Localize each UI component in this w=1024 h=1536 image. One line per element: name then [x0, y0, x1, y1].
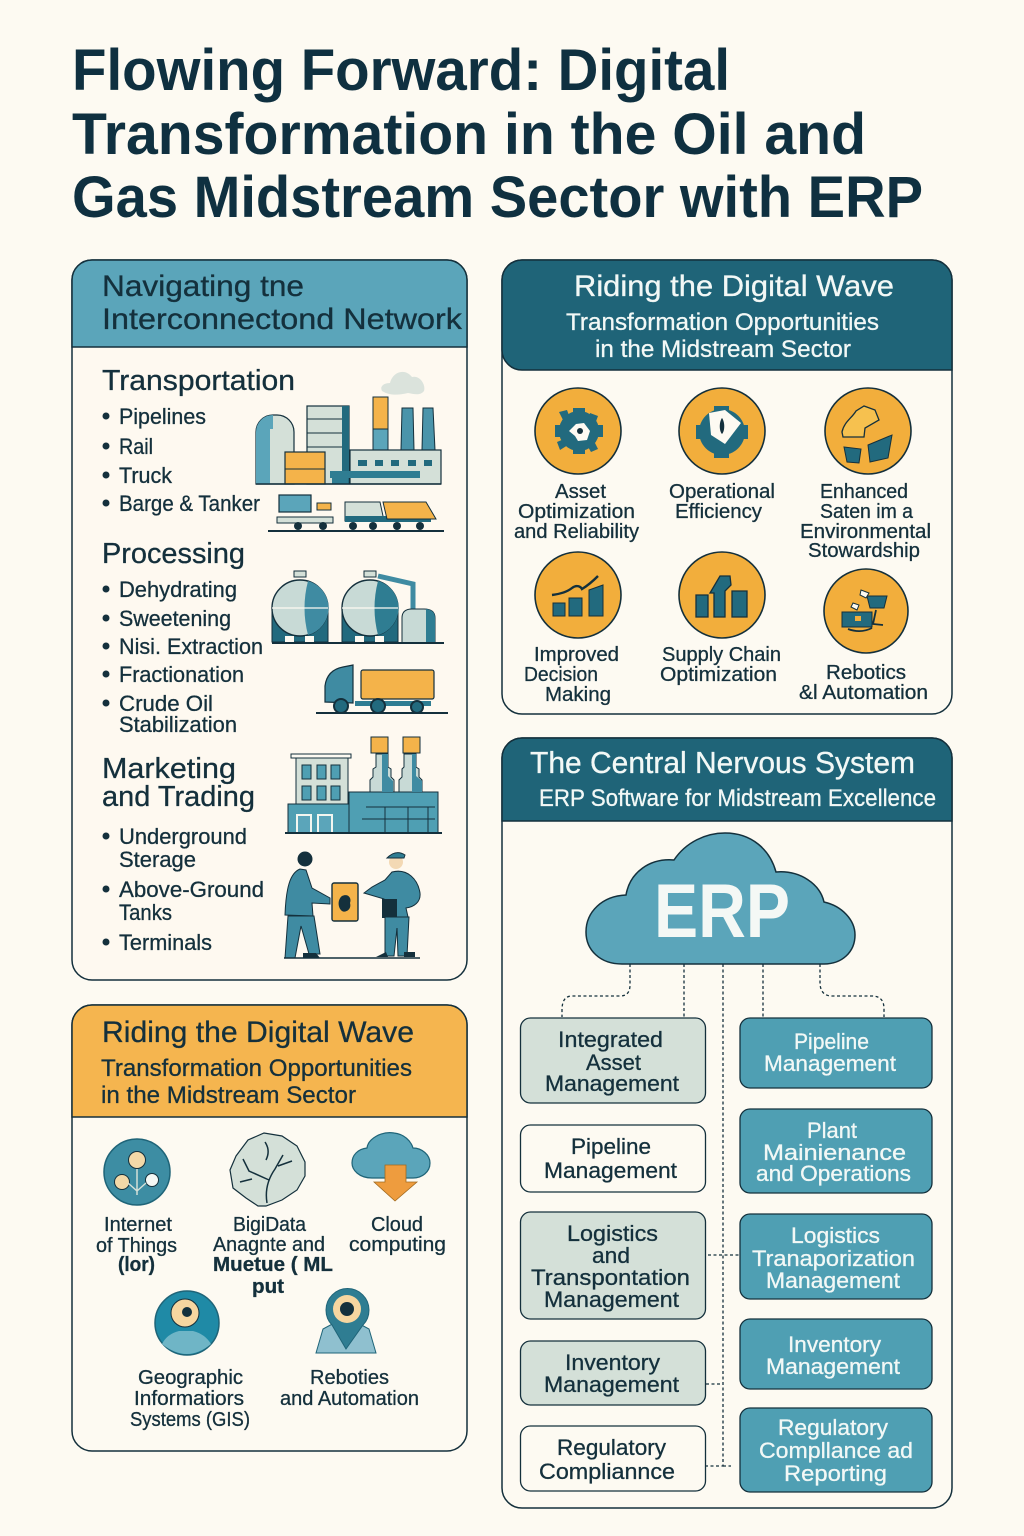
module: logistics and transportation management (left): and — [592, 1243, 630, 1268]
panel header: riding the digital wave (yellow): in the Midstream Sector — [101, 1082, 356, 1109]
panel header: central nervous system: ERP Software for Midstream Excellence — [539, 785, 936, 812]
panel header: navigating: Navigating tne — [102, 270, 304, 303]
label: enhanced safety and environmental stewardship: Enhanced — [820, 481, 908, 503]
icon: operational efficiency — [679, 388, 765, 474]
icon: asset optimization gear — [535, 388, 621, 474]
list: transportation modes: Barge & Tanker — [119, 491, 260, 516]
list: marketing and trading assets: Sterage — [119, 847, 196, 872]
module: integrated asset management: Asset — [586, 1050, 641, 1075]
heading: marketing and trading: Marketing — [102, 753, 236, 785]
list: transportation modes: Pipelines — [119, 404, 206, 429]
label: geographic information systems — [130, 1367, 250, 1431]
module: logistics transportation management (right): Logistics — [791, 1223, 880, 1248]
icon: storage tanks — [272, 571, 444, 643]
label: supply chain optimization: Supply Chain — [662, 644, 781, 666]
module: regulatory compliance (left): Regulatory — [557, 1435, 666, 1460]
panel header: riding the digital wave (yellow) — [72, 1005, 467, 1117]
heading: marketing and trading — [102, 753, 255, 813]
label: internet of things: (lor) — [118, 1254, 155, 1276]
icon: internet of things — [104, 1139, 170, 1205]
icon: robotics and automation (left) — [316, 1288, 376, 1353]
label: big data analytics and machine learning: Anagnte and — [213, 1234, 325, 1256]
icon: safety and environmental stewardship — [825, 388, 911, 474]
module: logistics and transportation management (left) — [520, 1212, 706, 1319]
panel: digital wave opportunities (right) — [502, 260, 952, 714]
label: enhanced safety and environmental stewardship: Environmental — [800, 521, 931, 543]
label: big data analytics and machine learning: put — [252, 1276, 284, 1298]
label: geographic information systems: Systems (GIS) — [130, 1409, 250, 1431]
label: operational efficiency: Efficiency — [675, 501, 762, 523]
module: logistics and transportation management (left): Logistics — [567, 1221, 658, 1246]
icon: improved decision making chart — [535, 552, 621, 638]
module: integrated asset management — [520, 1018, 706, 1103]
icon: erp cloud — [586, 833, 855, 964]
label: robotics and automation (left): and Automation — [280, 1388, 419, 1410]
module: inventory management (right): Management — [766, 1354, 900, 1379]
heading: transportation: Transportation — [102, 365, 295, 397]
panel: central nervous system erp — [502, 738, 952, 1508]
list: processing steps — [102, 577, 263, 737]
module: integrated asset management: Management — [545, 1071, 679, 1096]
module: plant maintenance and operations — [740, 1109, 932, 1193]
list: transportation modes — [102, 404, 260, 516]
label: improved decision making: Decision — [524, 664, 598, 686]
title: Flowing Forward: Digital — [72, 38, 730, 103]
label: robotics and automation (left): Reboties — [310, 1367, 389, 1389]
module: regulatory compliance and reporting — [740, 1408, 932, 1492]
module: logistics transportation management (right): Tranaporization — [752, 1246, 915, 1271]
icon: two traders exchanging a barrel — [284, 852, 420, 958]
list: marketing and trading assets: Terminals — [119, 930, 212, 955]
label: operational efficiency — [669, 481, 775, 523]
label: robotics and automation (right): Rebotics — [826, 662, 906, 684]
module: inventory management (left): Inventory — [565, 1350, 660, 1375]
label: supply chain optimization — [660, 644, 781, 686]
panel header: central nervous system — [502, 738, 952, 821]
label: cloud computing — [349, 1214, 446, 1256]
label: improved decision making: Making — [545, 684, 611, 706]
label: geographic information systems: Informatiors — [134, 1388, 244, 1410]
title — [72, 38, 923, 230]
label: robotics and automation (right): &l Automation — [799, 682, 928, 704]
list: processing steps: Fractionation — [119, 662, 244, 687]
label: enhanced safety and environmental stewardship — [800, 481, 931, 562]
label: robotics and automation (left) — [280, 1367, 419, 1410]
icon: big data globe — [230, 1133, 305, 1206]
heading: marketing and trading: and Trading — [102, 781, 255, 813]
label: big data analytics and machine learning — [213, 1214, 333, 1298]
panel header: navigating: Interconnectond Network — [102, 303, 463, 336]
label: improved decision making: Improved — [534, 644, 619, 666]
module: regulatory compliance and reporting: Reporting — [784, 1461, 887, 1486]
module: plant maintenance and operations: and Operations — [756, 1161, 911, 1186]
icon: supply chain optimization — [679, 552, 765, 638]
panel header: riding the digital wave (teal) — [502, 260, 952, 370]
list: marketing and trading assets — [102, 824, 264, 955]
label: asset optimization and reliability — [514, 481, 639, 543]
icon: geographic information systems — [155, 1291, 219, 1355]
module: regulatory compliance and reporting: Regulatory — [778, 1415, 888, 1440]
module: logistics and transportation management (left): Management — [544, 1287, 679, 1312]
module: integrated asset management: Integrated — [558, 1027, 663, 1052]
title: Transformation in the Oil and — [72, 102, 866, 167]
label: asset optimization and reliability: and Reliability — [514, 521, 639, 543]
title: Gas Midstream Sector with ERP — [72, 165, 923, 230]
label: asset optimization and reliability: Asset — [555, 481, 606, 503]
label: big data analytics and machine learning: BigiData — [233, 1214, 307, 1236]
icon: trading facility — [285, 737, 442, 833]
panel header: riding the digital wave (teal): in the Midstream Sector — [595, 336, 851, 363]
label: asset optimization and reliability: Optimization — [518, 501, 635, 523]
list: marketing and trading assets: Underground — [119, 824, 247, 849]
module: inventory management (right) — [740, 1319, 932, 1389]
module: logistics transportation management (right): Management — [766, 1268, 900, 1293]
module: plant maintenance and operations: Mainienance — [763, 1140, 906, 1165]
panel header: riding the digital wave (teal): Riding the Digital Wave — [574, 270, 894, 303]
icon: cloud computing — [352, 1133, 430, 1201]
list: processing steps: Nisi. Extraction — [119, 634, 263, 659]
label: improved decision making — [524, 644, 619, 706]
label: internet of things: of Things — [96, 1235, 177, 1257]
module: regulatory compliance and reporting: Compllance ad — [759, 1438, 913, 1463]
label: cloud computing: Cloud — [371, 1214, 423, 1236]
heading: processing: Processing — [102, 538, 245, 570]
icon: refinery with cloud — [256, 372, 444, 531]
label: internet of things: Internet — [104, 1214, 172, 1236]
label: geographic information systems: Geographic — [138, 1367, 243, 1389]
module: pipeline management (left): Pipeline — [571, 1134, 651, 1159]
module: pipeline management (left): Management — [544, 1158, 677, 1183]
module: regulatory compliance (left): Compliannce — [539, 1459, 675, 1484]
icon: erp cloud: ERP — [654, 869, 790, 954]
label: big data analytics and machine learning: Muetue ( ML — [213, 1254, 333, 1276]
panel header: navigating — [72, 260, 467, 347]
list: transportation modes: Rail — [119, 434, 153, 459]
icon: robotics and automation — [824, 569, 908, 653]
label: supply chain optimization: Optimization — [660, 664, 777, 686]
label: robotics and automation (right) — [799, 662, 928, 704]
list: marketing and trading assets: Above-Ground — [119, 877, 264, 902]
list: transportation modes: Truck — [119, 463, 173, 488]
module: pipeline management (right): Pipeline — [794, 1029, 869, 1054]
panel header: riding the digital wave (teal): Transformation Opportunities — [566, 309, 879, 336]
label: enhanced safety and environmental stewardship: Saten im a — [820, 501, 914, 523]
module: pipeline management (left) — [520, 1125, 706, 1192]
label: cloud computing: computing — [349, 1234, 446, 1256]
module: logistics transportation management (right) — [740, 1214, 932, 1299]
list: processing steps: Dehydrating — [119, 577, 237, 602]
panel header: central nervous system: The Central Nervous System — [530, 745, 915, 780]
panel header: riding the digital wave (yellow): Riding the Digital Wave — [102, 1016, 414, 1049]
module: inventory management (left) — [520, 1341, 706, 1405]
label: internet of things — [96, 1214, 177, 1276]
icon: tanker truck — [316, 665, 448, 713]
module: inventory management (right): Inventory — [788, 1332, 881, 1357]
panel header: riding the digital wave (yellow): Transformation Opportunities — [101, 1055, 412, 1082]
connectors: cloud to modules — [562, 964, 884, 1466]
list: processing steps: Stabilization — [119, 712, 237, 737]
list: marketing and trading assets: Tanks — [119, 900, 172, 925]
module: regulatory compliance (left) — [520, 1426, 706, 1491]
list: processing steps: Sweetening — [119, 606, 231, 631]
panel: digital wave technologies (left, yellow) — [72, 1005, 467, 1451]
label: operational efficiency: Operational — [669, 481, 775, 503]
module: pipeline management (right) — [740, 1018, 932, 1088]
module: plant maintenance and operations: Plant — [807, 1118, 857, 1143]
label: enhanced safety and environmental stewardship: Stowardship — [808, 540, 920, 562]
panel: navigating the interconnected network — [72, 260, 467, 980]
module: pipeline management (right): Management — [764, 1051, 896, 1076]
module: logistics and transportation management (left): Transpontation — [531, 1265, 690, 1290]
module: inventory management (left): Management — [544, 1372, 679, 1397]
list: processing steps: Crude Oil — [119, 691, 213, 716]
